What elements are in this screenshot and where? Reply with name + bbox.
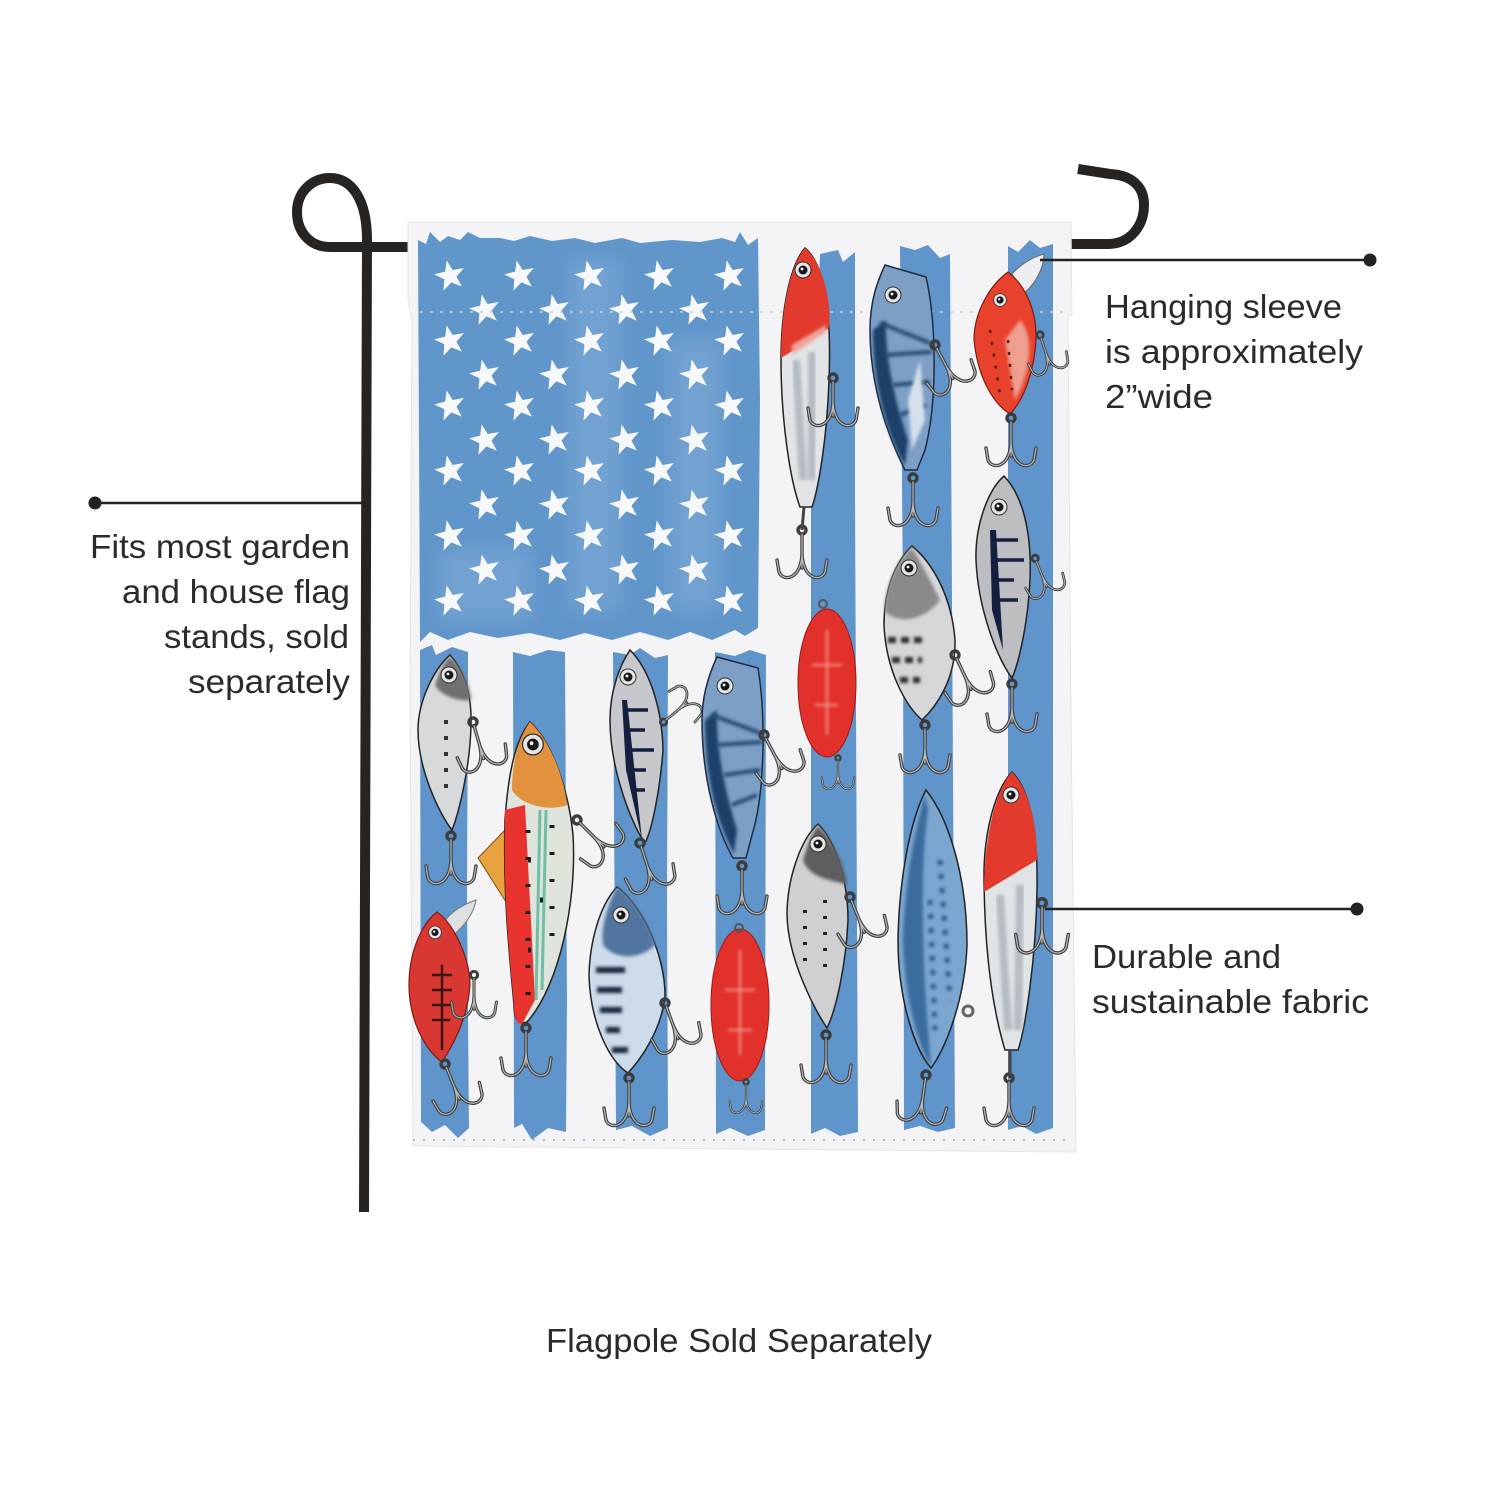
lure: grey lower	[787, 824, 891, 1083]
callout: fits most stands	[88, 496, 366, 700]
lure: grey left	[418, 655, 510, 884]
lure: blue popper top	[870, 265, 979, 526]
flag pole stand	[297, 178, 408, 1212]
lure: red head pencil	[777, 248, 858, 578]
callout: fits most stands: stands, sold	[164, 618, 349, 655]
callout: durable fabric: Durable and	[1092, 938, 1281, 975]
lure: red spoon upper	[798, 600, 856, 789]
lure: grey fish	[884, 546, 998, 773]
stars	[432, 257, 748, 617]
lure: silver middle	[610, 650, 706, 896]
lure: red head pencil lower	[984, 772, 1068, 1126]
callout: hanging sleeve: 2”wide	[1105, 378, 1213, 415]
callout: fits most stands: Fits most garden	[90, 528, 350, 565]
caption: flagpole sold separately: Flagpole Sold Separately	[546, 1322, 933, 1359]
lure: blue-grey fish	[589, 887, 705, 1126]
callout: durable fabric	[1045, 902, 1369, 1020]
flag fabric	[408, 222, 1076, 1152]
right pole hook	[1068, 169, 1144, 244]
hem stitching	[413, 1139, 1072, 1141]
canton	[418, 232, 760, 642]
callout: hanging sleeve	[1040, 254, 1376, 415]
lure: silver right	[976, 476, 1068, 732]
lure: long blue	[895, 790, 973, 1126]
lure: trout	[478, 722, 628, 1076]
lure: red spoon lower	[711, 924, 769, 1113]
callout: durable fabric: sustainable fabric	[1092, 983, 1369, 1020]
lure: red crankbait lower	[409, 900, 496, 1117]
lure: red crankbait top	[974, 254, 1071, 466]
canton lighter wash	[440, 260, 720, 620]
panel: garden flag	[408, 222, 1076, 1152]
sleeve stitching	[420, 311, 1068, 313]
blue stripes	[420, 240, 1053, 1140]
callout: hanging sleeve: is approximately	[1105, 333, 1364, 370]
lure: blue popper middle	[702, 657, 808, 914]
callout: hanging sleeve: Hanging sleeve	[1105, 288, 1342, 325]
callout: fits most stands: separately	[188, 663, 351, 700]
callout: fits most stands: and house flag	[122, 573, 350, 610]
